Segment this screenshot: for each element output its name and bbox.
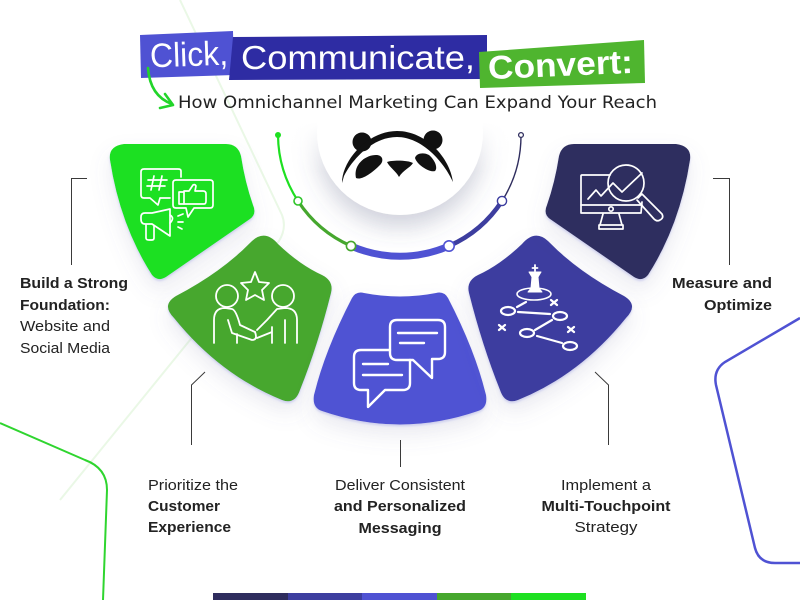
label: implement multi-touchpoint: Implement a	[561, 478, 652, 494]
icon: monitor with magnifier	[581, 165, 663, 229]
label: measure and optimize	[672, 276, 772, 314]
label: build a strong foundation: Website and	[20, 319, 110, 335]
label: deliver consistent messaging	[334, 478, 466, 537]
icon: chess strategy	[499, 265, 577, 350]
label: implement multi-touchpoint: Strategy	[574, 520, 638, 536]
bottom colour bar	[213, 593, 586, 600]
label: build a strong foundation: Foundation:	[20, 298, 110, 314]
title	[140, 31, 657, 112]
panda disc	[310, 130, 490, 237]
icon: panda face	[342, 130, 453, 183]
panel: multi-touchpoint strategy	[468, 236, 632, 401]
panel: measure and optimize	[546, 144, 690, 279]
label: implement multi-touchpoint	[542, 478, 671, 536]
title banner: Communicate: Communicate,	[241, 39, 475, 76]
arrow: title to subtitle	[148, 68, 173, 108]
label: deliver consistent messaging: Messaging	[358, 521, 442, 537]
connector lines	[72, 178, 730, 467]
label: implement multi-touchpoint: Multi-Touchpoint	[542, 499, 671, 515]
icon: social bubbles and megaphone	[141, 169, 213, 240]
label: deliver consistent messaging: and Personalized	[334, 499, 466, 515]
subtitle: How Omnichannel Marketing Can Expand Your Reach	[178, 93, 657, 112]
label: measure and optimize: Optimize	[704, 298, 772, 314]
panel: consistent messaging	[314, 293, 486, 424]
label: prioritize the customer experience: Experience	[148, 520, 231, 536]
title banner: Communicate	[229, 35, 487, 80]
label: prioritize the customer experience	[148, 478, 238, 536]
panel: website and social media	[110, 144, 254, 279]
panel: customer experience	[168, 236, 332, 401]
arc timeline	[275, 132, 523, 256]
label: measure and optimize: Measure and	[672, 276, 772, 292]
label: build a strong foundation: Build a Strong	[20, 276, 128, 292]
icon: handshake with star	[214, 272, 297, 343]
label: deliver consistent messaging: Deliver Consistent	[335, 478, 465, 494]
icon: chat bubbles	[354, 320, 445, 407]
label: prioritize the customer experience: Prioritize the	[148, 478, 238, 494]
label: build a strong foundation: Social Media	[20, 341, 111, 357]
title banner: Convert: Convert:	[487, 43, 634, 86]
label: build a strong foundation	[20, 276, 128, 357]
title banner: Click: Click,	[149, 35, 229, 75]
label: prioritize the customer experience: Customer	[148, 499, 220, 515]
